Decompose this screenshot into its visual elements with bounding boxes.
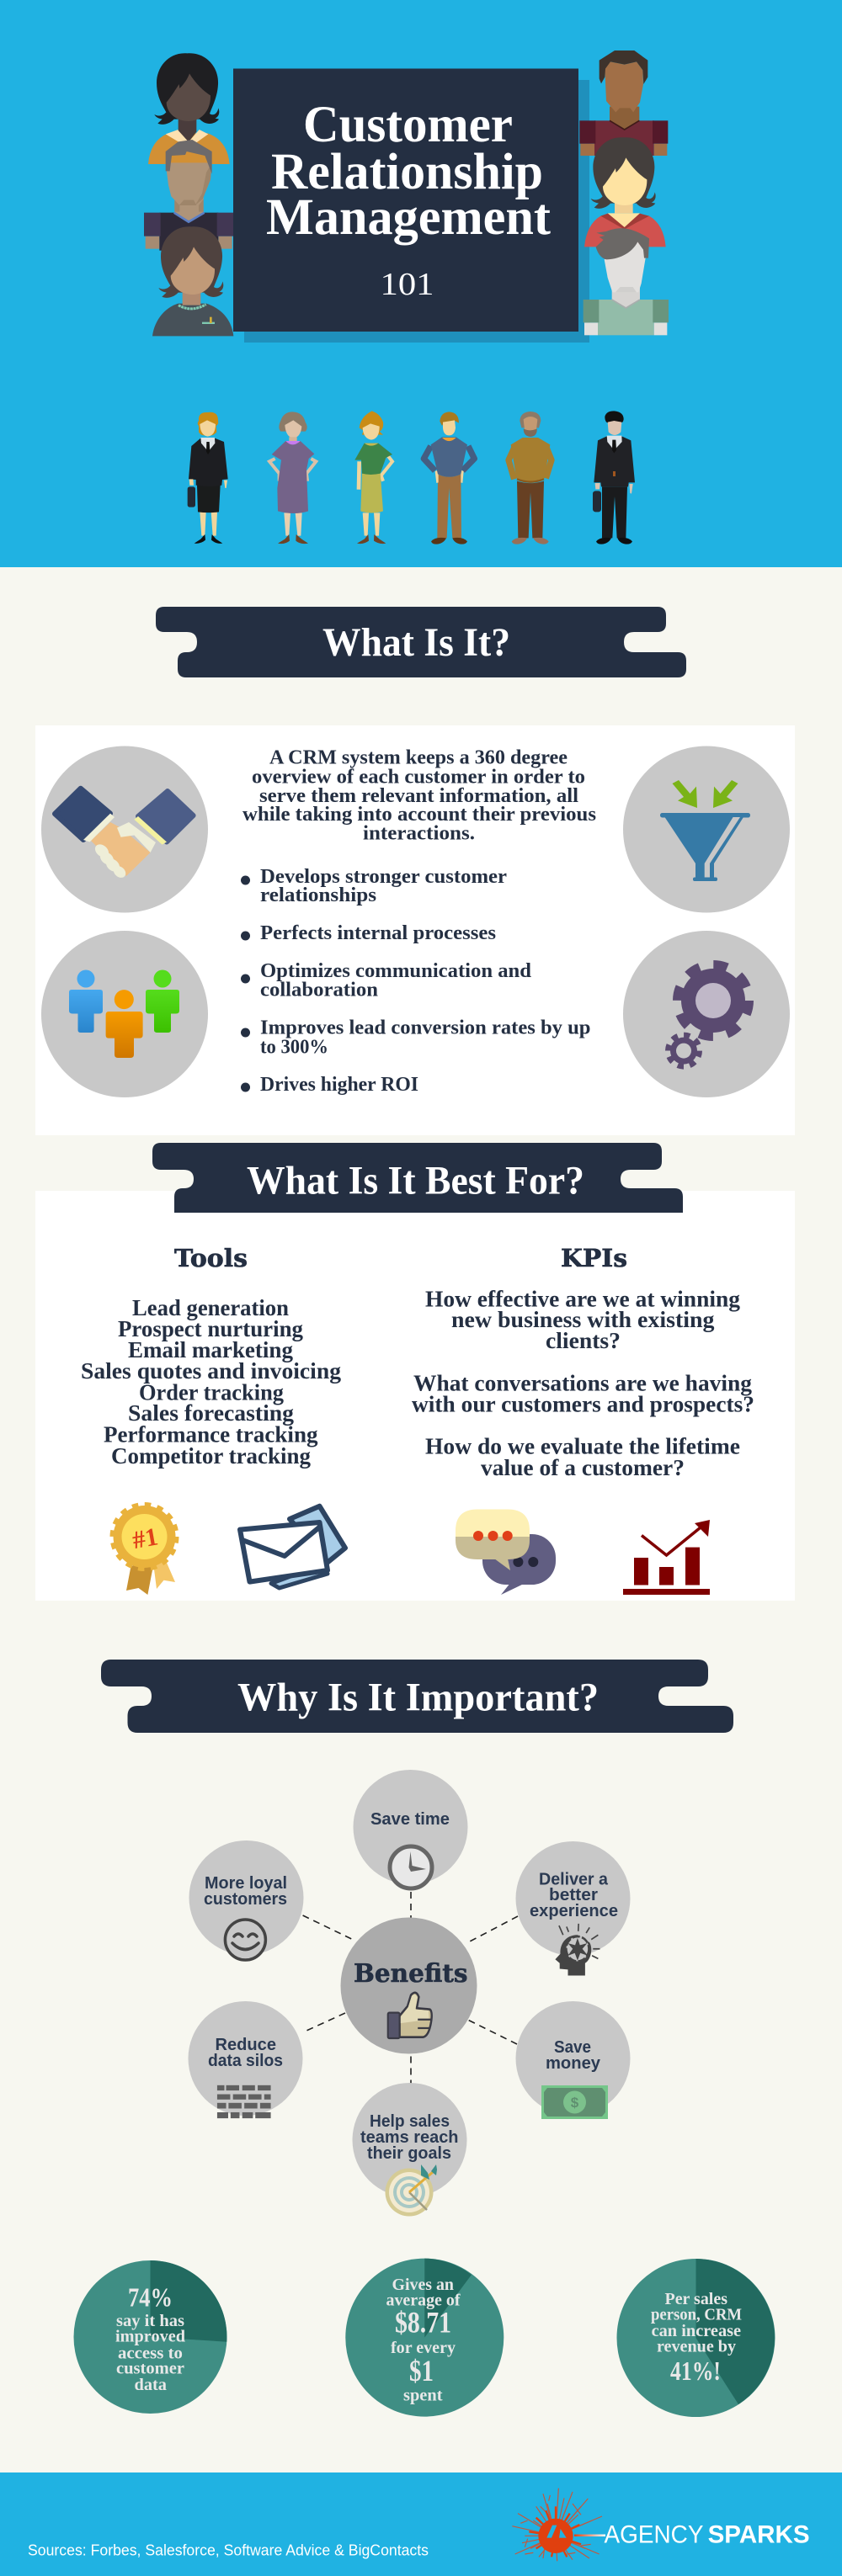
icon: banknote: $ [571,2095,579,2111]
portrait: man with grey hair and green shirt [584,228,669,335]
intro paragraph: overview of each customer in order to [252,766,585,788]
figure: businesswoman with briefcase [188,412,228,544]
icon: thumbs up [388,1993,432,2038]
portrait: man with grey hair and dark shirt [144,140,233,251]
benefit: deliver a better experience: Deliver a [539,1870,609,1888]
dashed connectors [303,1892,518,2084]
portrait: woman with dark hair and orange top [148,53,230,164]
icon: funnel with arrows [623,746,790,912]
bullet: communication [241,960,532,1001]
pie chart: 74%: say it has [116,2312,184,2330]
benefit: deliver a better experience [515,1841,630,1975]
benefit: more loyal customers [189,1840,303,1960]
logo wordmark: AGENCY: AGENCY [605,2521,704,2549]
intro paragraph [242,747,596,844]
title: Management: Management [266,189,552,246]
benefit: deliver a better experience: better [549,1885,598,1904]
figure: businessman with briefcase [593,411,635,544]
benefit: help sales teams: their goals [367,2143,451,2163]
portrait: woman with yellow face and red top [584,137,666,247]
benefit: save time [354,1770,468,1888]
benefit: help sales teams: teams reach [360,2127,458,2147]
header panel [0,0,842,567]
figure: bearded man in mustard sweater [509,412,552,544]
bullet: communication: Optimizes communication and [260,960,532,982]
benefit: save money: Save [554,2037,591,2057]
sources: Sources: Forbes, Salesforce, Software Advice & BigContacts [28,2542,429,2559]
tools list: Order tracking [139,1379,284,1405]
icon: gears [623,931,790,1097]
pie chart: $8.71: average of [386,2291,461,2309]
pie chart: 41%: person, CRM [651,2306,742,2324]
subtitle: 101: 101 [381,267,434,302]
icon: award badge [113,1505,177,1595]
icon: growth chart [623,1520,710,1595]
pie chart: $8.71: for every [391,2339,456,2357]
pie chart: 41%: 41%! [670,2356,721,2386]
intro paragraph: A CRM system keeps a 360 degree [269,747,568,769]
bullet list [241,866,591,1096]
pie chart: 41%: can increase [652,2322,741,2340]
title card shadow [244,80,589,343]
icon: head with burst [555,1924,600,1975]
intro paragraph: interactions. [363,822,475,844]
tools list [81,1295,342,1469]
bullet: stronger relationships: Develops stronger customer [260,866,507,888]
bullet: communication: collaboration [260,980,378,1001]
heading: KPIs: KPIs [561,1244,627,1272]
pie chart: $8.71: $1 [409,2354,434,2387]
tools list: Performance tracking [104,1422,318,1447]
footer [0,2472,842,2576]
bullet: lead conversion: to 300% [260,1036,328,1058]
portrait: woman with brown hair and grey top [152,226,233,336]
benefit: save money [515,2001,630,2119]
pie chart: 74%: data [135,2376,167,2394]
heading text: What Is It Best For? [247,1158,584,1203]
benefit: central hub [340,1917,477,2053]
panel: what is it [35,725,795,1135]
icon: clock [390,1846,432,1888]
panel: what is it best for [35,1191,795,1601]
bullet: lead conversion [241,1017,591,1058]
heading: Tools: Tools [174,1244,248,1272]
KPI question 1: How effective are we at winning [425,1286,741,1311]
figure: woman in purple dress [269,412,316,544]
KPI question 3 [425,1434,740,1480]
pie chart: 41%: revenue by [657,2338,737,2356]
KPI question 1: new business with existing [451,1307,715,1332]
intro paragraph: while taking into account their previous [242,804,596,826]
column: KPIs [412,1244,754,1595]
banner: What Is It? [156,607,686,677]
KPI question 2: with our customers and prospects? [412,1392,754,1417]
tools list: Prospect nurturing [118,1316,303,1341]
title: Relationship: Relationship [271,144,543,200]
bullet: stronger relationships: relationships [260,884,376,906]
figure: woman in green top and olive skirt [354,411,392,544]
KPI question 2: What conversations are we having [413,1371,753,1396]
heading text: What Is It? [322,620,510,665]
pie chart: $8.71: $8.71 [395,2306,451,2340]
benefit: save money: money [546,2053,601,2073]
logo wordmark: SPARKS: SPARKS [708,2521,810,2549]
benefit: help sales teams [352,2083,466,2217]
tools list: Sales forecasting [128,1400,295,1426]
icon: smiley [225,1920,265,1960]
KPI question 3: How do we evaluate the lifetime [425,1434,740,1459]
tools list: Email marketing [128,1337,293,1362]
pie chart: $8.71: spent [403,2387,443,2405]
logo connector [574,2535,605,2536]
benefit: reduce data silos: Reduce [216,2035,276,2054]
icon: envelope [240,1506,345,1588]
benefit: more loyal customers: More loyal [205,1873,287,1893]
benefit: deliver a better experience: experience [530,1901,618,1920]
logo: Agency Sparks [512,2488,810,2561]
bullet: lead conversion: Improves lead conversion rates by up [260,1017,591,1039]
pie chart: 74%: access to [118,2345,183,2363]
bullet: internal processes: Perfects internal processes [260,922,496,944]
banner: What Is It Best For? [152,1143,683,1213]
benefit: save time: Save time [370,1809,450,1829]
benefit: reduce data silos: data silos [208,2051,283,2070]
pie chart: 74% [74,2260,227,2414]
benefit: more loyal customers: customers [204,1889,287,1909]
icon: brick wall [217,2085,271,2118]
benefit: help sales teams: Help sales [370,2111,450,2131]
KPI question 3: value of a customer? [481,1455,685,1480]
icon: award badge: #1 [131,1522,160,1554]
pie chart: 74%: improved [115,2328,186,2346]
logo burst [512,2488,602,2561]
bullet: stronger relationships [241,866,507,906]
pie chart: $8.71: Gives an [392,2276,455,2294]
intro paragraph: serve them relevant information, all [259,785,578,807]
icon: target with arrow [386,2164,437,2217]
portrait: man with dark skin and maroon shirt [579,50,668,156]
benefits diagram [189,1770,630,2217]
banner: Why Is It Important? [101,1660,733,1733]
icon: team of people [41,931,208,1097]
tools list: Lead generation [132,1295,289,1320]
KPI question 2 [412,1371,754,1417]
KPI question 1 [425,1286,741,1353]
heading text: Why Is It Important? [237,1676,599,1720]
icon: chat bubbles [456,1510,556,1595]
pie chart: 74%: customer [116,2360,184,2378]
hub label: Benefits [354,1959,468,1989]
title: Customer: Customer [303,97,513,153]
pie chart: 41%: Per sales [665,2290,727,2308]
title card [233,69,578,332]
bullet: ROI: Drives higher ROI [260,1074,418,1096]
column: tools [81,1244,345,1595]
figure: man in blue sweater [424,412,474,544]
pie chart: 41% [616,2259,775,2417]
KPI question 1: clients? [546,1328,621,1353]
icon: handshake [41,746,208,912]
tools list: Competitor tracking [111,1443,311,1469]
pie chart: 74%: 74% [128,2282,173,2313]
benefit: reduce data silos [189,2001,303,2118]
pie chart: $8.71 [345,2259,504,2417]
tools list: Sales quotes and invoicing [81,1358,342,1384]
